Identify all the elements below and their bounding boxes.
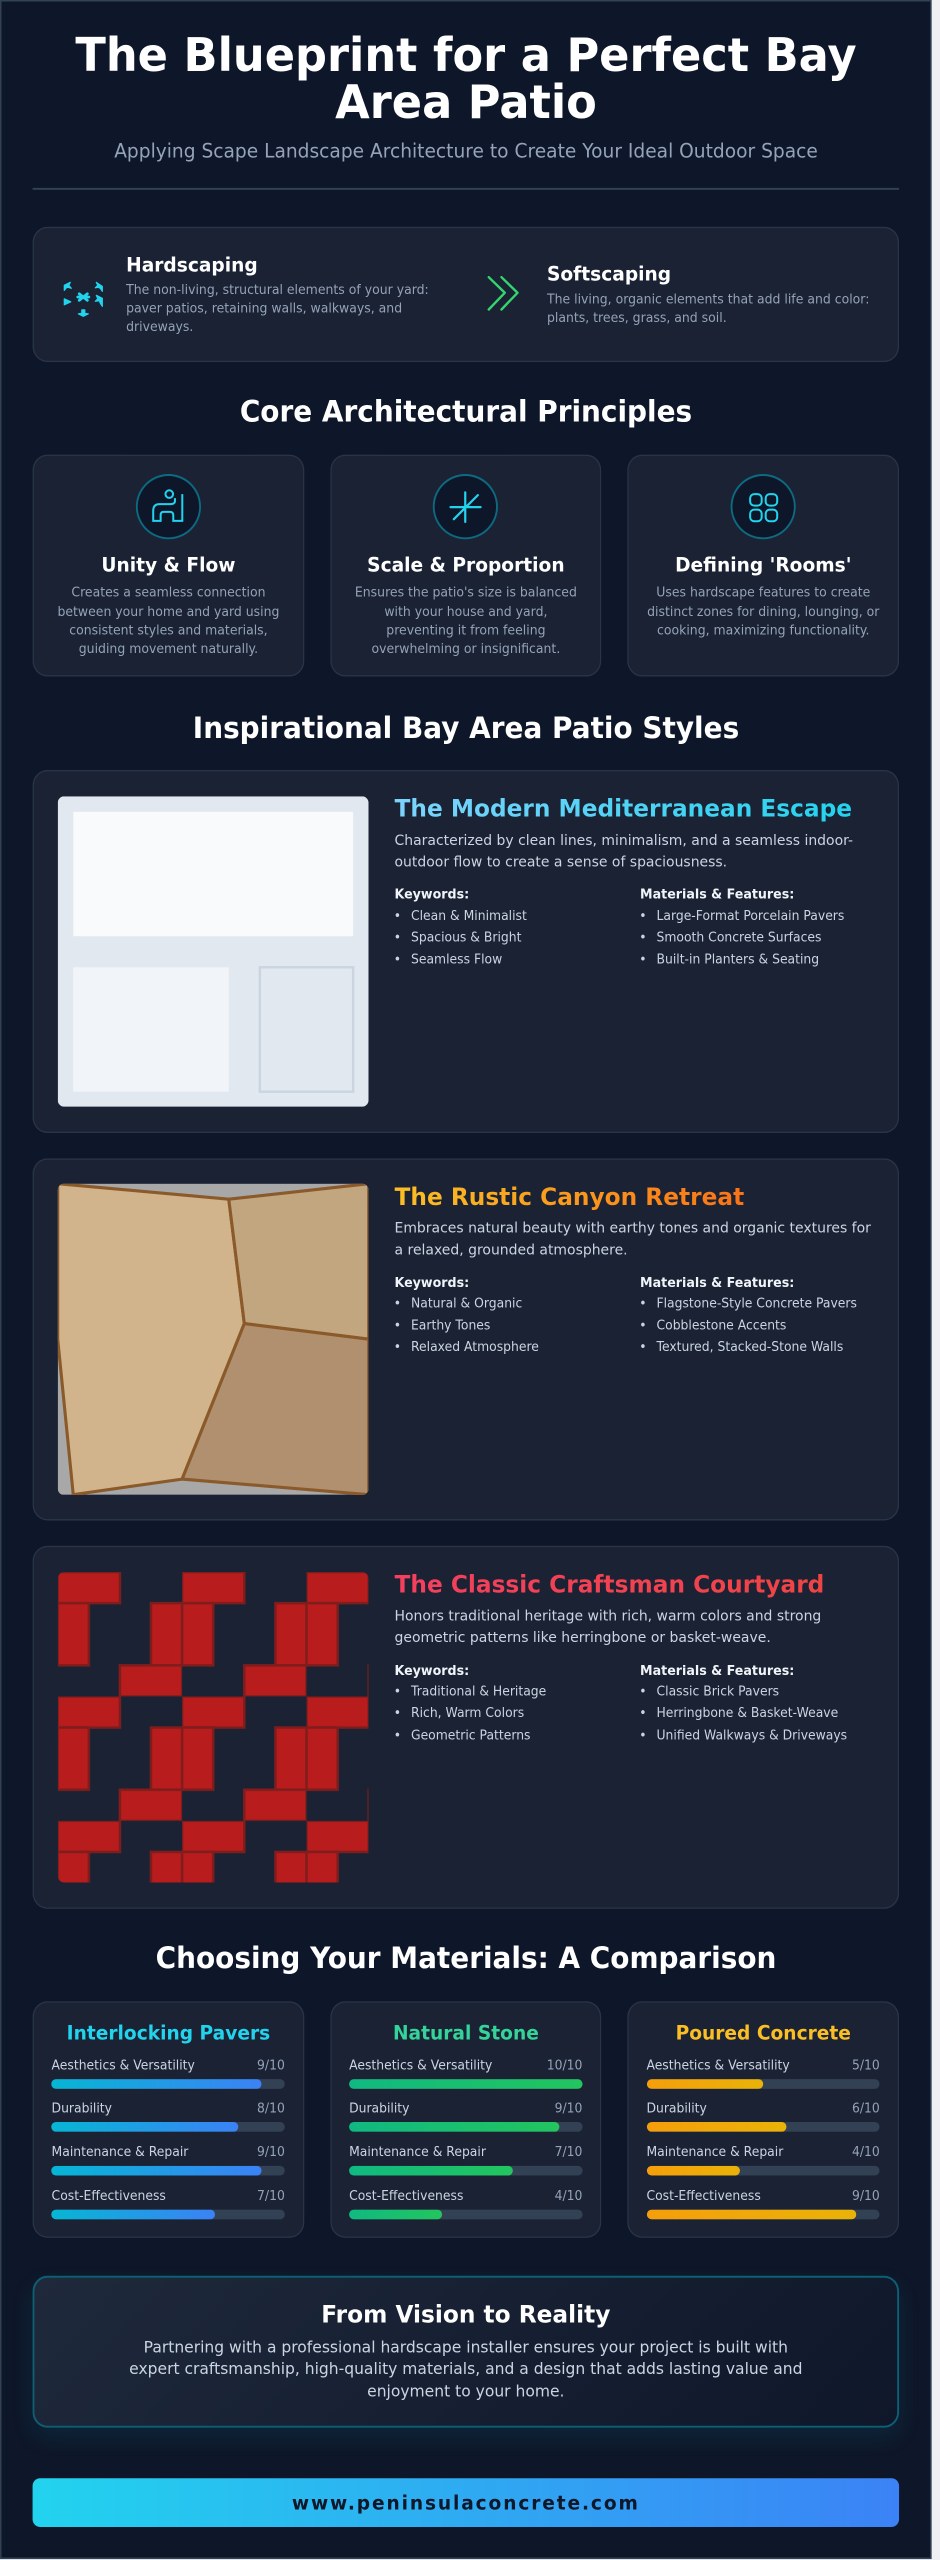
text: modern mediterranean description: outdoor flow to create a sense of spaciousness.: [395, 853, 727, 870]
text: unity and flow description: Creates a seamless connection: [71, 586, 266, 601]
list: materials and features: [639, 887, 844, 967]
bar: cost: [646, 2189, 880, 2220]
list: materials and features: •: [639, 953, 647, 967]
list: materials and features: •: [639, 1729, 647, 1743]
footer: website banner: [33, 2478, 899, 2527]
bar: maintenance: [51, 2145, 285, 2176]
panel: defining rooms: [627, 455, 899, 677]
list: keywords: •: [394, 1707, 401, 1721]
list: materials and features: •: [639, 1319, 647, 1333]
heading: core architectural principles: Core Architectural Principles: [240, 395, 692, 429]
list: materials and features: [639, 1275, 857, 1355]
panel: unity and flow: [33, 455, 304, 677]
text: defining rooms description: Uses hardscape features to create: [656, 586, 870, 601]
list: materials and features: •: [639, 1341, 647, 1355]
heading: poured concrete: Poured Concrete: [676, 2020, 851, 2044]
list: materials and features: Flagstone-Style Concrete Pavers: [656, 1297, 857, 1312]
list: keywords: [394, 1275, 539, 1355]
text: scale and proportion description: preventing it from feeling: [386, 624, 546, 638]
list: keywords: •: [394, 1341, 401, 1355]
panel: modern mediterranean: [33, 770, 899, 1133]
bar: aesthetics: Aesthetics & Versatility: [646, 2058, 790, 2073]
heading: modern mediterranean: The Modern Mediterranean Escape: [395, 794, 852, 823]
bar: maintenance: 7/10: [555, 2145, 582, 2160]
list: materials and features: •: [639, 909, 647, 924]
panel: poured concrete: [627, 2001, 899, 2238]
list: keywords: Clean & Minimalist: [411, 909, 527, 924]
list: keywords: Traditional & Heritage: [411, 1685, 546, 1700]
list: materials and features: Classic Brick Pavers: [656, 1685, 779, 1700]
bar: cost: 9/10: [852, 2189, 880, 2203]
title: Area Patio: [335, 74, 597, 129]
list: keywords: Keywords:: [395, 887, 469, 903]
bar: maintenance: [646, 2145, 880, 2176]
list: keywords: •: [394, 1729, 401, 1743]
list: materials and features: Materials & Features:: [640, 1275, 794, 1291]
bar: maintenance: Maintenance & Repair: [349, 2145, 486, 2160]
heading: softscaping: Softscaping: [547, 262, 671, 286]
heading: patio styles: Inspirational Bay Area Patio Styles: [193, 712, 739, 746]
icon: hardscaping: [64, 282, 103, 317]
text: classic craftsman description: geometric patterns like herringbone or basket-weave.: [395, 1629, 771, 1646]
text: rustic canyon description: a relaxed, grounded atmosphere.: [395, 1241, 628, 1258]
bar: aesthetics: 5/10: [852, 2058, 880, 2073]
list: materials and features: •: [639, 931, 647, 945]
bar: maintenance: [349, 2145, 582, 2176]
bar: durability: 8/10: [257, 2102, 285, 2116]
text: unity and flow description: [57, 586, 279, 657]
illustration: large format pavers: [58, 796, 368, 1107]
bar: durability: 9/10: [555, 2102, 582, 2116]
list: keywords: Earthy Tones: [411, 1319, 490, 1333]
list: keywords: Geometric Patterns: [411, 1729, 531, 1743]
heading: classic craftsman: The Classic Craftsman Courtyard: [395, 1570, 824, 1599]
text: callout body: Partnering with a professional hardscape installer ensures your project is built with: [144, 2337, 788, 2356]
panel: natural stone: [330, 2001, 602, 2238]
list: keywords: Keywords:: [395, 1663, 469, 1679]
list: keywords: Relaxed Atmosphere: [411, 1341, 539, 1355]
subtitle: Applying Scape Landscape Architecture to Create Your Ideal Outdoor Space: [114, 139, 818, 163]
bar: durability: [646, 2102, 880, 2132]
list: materials and features: Large-Format Porcelain Pavers: [656, 909, 844, 924]
text: scale and proportion description: [355, 586, 577, 657]
title: [75, 28, 857, 129]
text: hardscaping description: The non-living, structural elements of your yard:: [126, 283, 429, 298]
bar: durability: [51, 2102, 285, 2132]
text: callout body: [129, 2337, 802, 2400]
heading: natural stone: Natural Stone: [393, 2020, 539, 2044]
callout: from vision to reality: [33, 2276, 899, 2428]
list: materials and features: Smooth Concrete Surfaces: [656, 931, 821, 945]
text: callout body: expert craftsmanship, high-quality materials, and a design that adds lasting value and: [129, 2359, 802, 2378]
bar: cost: Cost-Effectiveness: [646, 2189, 761, 2203]
text: unity and flow description: consistent styles and materials,: [69, 624, 268, 638]
bar: cost: [349, 2189, 582, 2220]
bar: cost: Cost-Effectiveness: [349, 2189, 463, 2203]
bar: aesthetics: Aesthetics & Versatility: [52, 2058, 195, 2073]
text: hardscaping description: driveways.: [126, 320, 193, 335]
bar: maintenance: 4/10: [852, 2145, 880, 2160]
text: classic craftsman description: Honors traditional heritage with rich, warm colors and strong: [395, 1607, 821, 1624]
illustration: brick herringbone: [58, 1572, 368, 1882]
list: keywords: Natural & Organic: [411, 1297, 522, 1312]
bar: durability: 6/10: [852, 2102, 880, 2116]
panel: interlocking pavers: [33, 2001, 304, 2238]
panel: scale and proportion: [330, 455, 602, 677]
text: scale and proportion description: overwhelming or insignificant.: [372, 642, 560, 657]
text: defining rooms description: distinct zones for dining, lounging, or: [647, 605, 879, 620]
list: keywords: Seamless Flow: [411, 953, 502, 967]
bar: aesthetics: [51, 2058, 285, 2089]
heading: defining rooms: Defining 'Rooms': [675, 553, 851, 577]
text: rustic canyon description: [395, 1219, 871, 1258]
heading: interlocking pavers: Interlocking Pavers: [67, 2020, 270, 2044]
text: unity and flow description: guiding movement naturally.: [79, 642, 258, 657]
heading: from vision to reality: From Vision to Reality: [321, 2300, 610, 2328]
illustration: flagstone: [58, 1184, 368, 1495]
panel: rustic canyon: [33, 1158, 899, 1521]
list: keywords: Keywords:: [395, 1275, 469, 1291]
text: rustic canyon description: Embraces natural beauty with earthy tones and organic textures for: [395, 1219, 871, 1236]
text: softscaping description: plants, trees, grass, and soil.: [547, 311, 727, 326]
list: materials and features: [639, 1663, 847, 1743]
icon: scale asterisk: [433, 474, 498, 539]
icon: house: [136, 474, 201, 539]
list: keywords: •: [394, 1319, 401, 1333]
bar: durability: Durability: [52, 2102, 112, 2116]
icon: softscaping chevrons: [488, 276, 519, 311]
list: materials and features: Textured, Stacked-Stone Walls: [656, 1341, 843, 1355]
list: materials and features: Cobblestone Accents: [656, 1319, 786, 1333]
bar: cost: [51, 2189, 285, 2220]
bar: cost: 4/10: [555, 2189, 582, 2203]
list: keywords: •: [394, 1685, 401, 1700]
text: defining rooms description: cooking, maximizing functionality.: [657, 624, 869, 638]
bar: aesthetics: 10/10: [547, 2058, 582, 2073]
text: unity and flow description: between your home and yard using: [57, 605, 279, 620]
panel: hardscaping and softscaping: [33, 227, 899, 362]
bar: durability: Durability: [646, 2102, 707, 2116]
heading: unity and flow: Unity & Flow: [101, 553, 235, 577]
heading: materials comparison: Choosing Your Materials: A Comparison: [156, 1941, 776, 1976]
bar: maintenance: 9/10: [257, 2145, 285, 2160]
list: keywords: •: [394, 931, 401, 945]
heading: hardscaping: Hardscaping: [126, 253, 258, 277]
list: keywords: Spacious & Bright: [411, 931, 521, 945]
list: keywords: [394, 1663, 546, 1743]
title: The Blueprint for a Perfect Bay: [75, 28, 857, 82]
bar: aesthetics: [349, 2058, 582, 2089]
bar: durability: Durability: [349, 2102, 409, 2116]
text: modern mediterranean description: Characterized by clean lines, minimalism, and a seamless indoor-: [395, 831, 853, 849]
list: keywords: •: [394, 909, 401, 924]
text: defining rooms description: [647, 586, 880, 638]
footer: website banner: www.peninsulaconcrete.com: [292, 2491, 640, 2514]
icon: four rooms: [731, 474, 796, 539]
heading: scale and proportion: Scale & Proportion: [367, 553, 565, 577]
bar: cost: 7/10: [257, 2189, 285, 2203]
list: materials and features: Materials & Features:: [640, 1663, 794, 1679]
list: keywords: [394, 887, 527, 967]
text: hardscaping description: [126, 283, 429, 335]
list: materials and features: Materials & Features:: [640, 887, 794, 903]
list: materials and features: •: [639, 1707, 647, 1721]
text: callout body: enjoyment to your home.: [367, 2381, 564, 2400]
text: scale and proportion description: Ensures the patio's size is balanced: [355, 586, 577, 601]
list: materials and features: •: [639, 1685, 647, 1700]
list: materials and features: Built-in Planters & Seating: [656, 953, 819, 967]
list: materials and features: Unified Walkways & Driveways: [656, 1729, 847, 1743]
text: scale and proportion description: with your house and yard,: [384, 605, 547, 620]
heading: rustic canyon: The Rustic Canyon Retreat: [395, 1182, 744, 1211]
list: materials and features: •: [639, 1297, 647, 1312]
bar: aesthetics: [646, 2058, 880, 2089]
text: hardscaping description: paver patios, retaining walls, walkways, and: [126, 302, 402, 316]
text: softscaping description: The living, organic elements that add life and color:: [547, 293, 869, 307]
bar: maintenance: Maintenance & Repair: [52, 2145, 188, 2160]
text: softscaping description: [546, 293, 869, 326]
text: modern mediterranean description: [395, 831, 853, 870]
bar: aesthetics: 9/10: [257, 2058, 285, 2073]
list: keywords: Rich, Warm Colors: [411, 1707, 524, 1721]
bar: aesthetics: Aesthetics & Versatility: [349, 2058, 492, 2073]
panel: classic craftsman: [33, 1546, 899, 1909]
bar: maintenance: Maintenance & Repair: [646, 2145, 783, 2160]
list: materials and features: Herringbone & Basket-Weave: [656, 1707, 838, 1721]
text: classic craftsman description: [395, 1607, 821, 1646]
list: keywords: •: [394, 1297, 401, 1312]
list: keywords: •: [394, 953, 401, 967]
bar: durability: [349, 2102, 582, 2132]
bar: cost: Cost-Effectiveness: [52, 2189, 166, 2203]
